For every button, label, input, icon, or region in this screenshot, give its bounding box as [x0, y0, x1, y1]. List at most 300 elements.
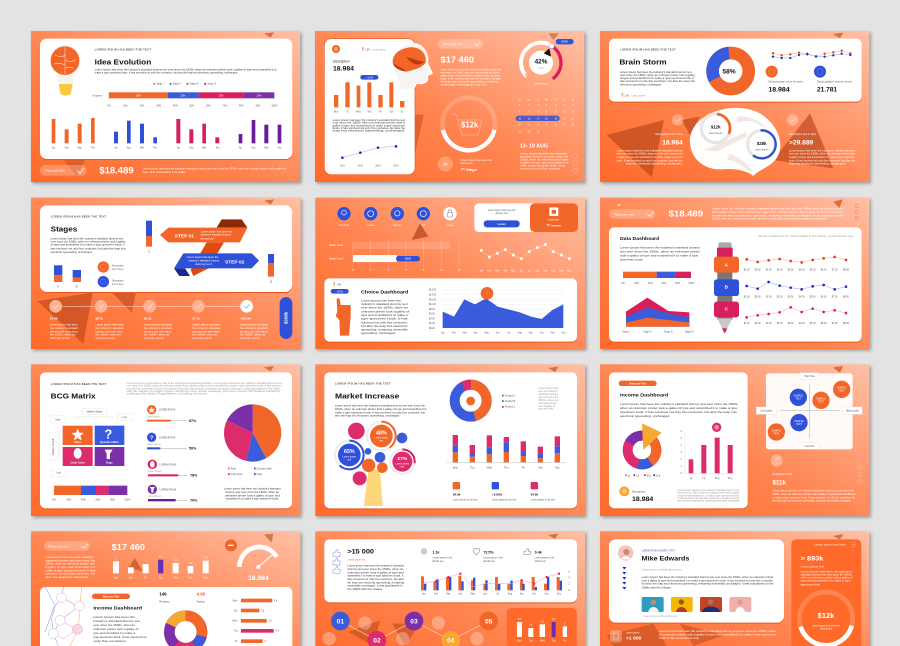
step 01: dummy text [200, 237, 214, 240]
pie legend [228, 467, 273, 476]
line chart: C: $4.00 [799, 323, 805, 325]
line chart: B: $8.00 [843, 297, 850, 299]
text block: standard dummy text ever since the [520, 155, 569, 158]
stacked bar: 100% [124, 500, 130, 502]
blue total pill: $358k [284, 311, 289, 324]
text block: has survived not only five centuries, but also the leap into [51, 247, 127, 250]
bar chart: market size: Market size B [329, 244, 344, 247]
positioning map: SAMPLE [794, 420, 804, 423]
panel: orange bar chart: 3.3 [541, 621, 545, 623]
text block: galley of type and scrambled it to make a type specimen [441, 75, 501, 78]
positioning map: TEXT [795, 399, 802, 401]
panel: white card [324, 539, 577, 603]
timeline values and text: +$35.9k [240, 317, 251, 321]
line chart: B: $0.00 [755, 297, 761, 299]
bar chart: 2 [681, 459, 683, 461]
pill button [44, 541, 90, 551]
slide: numbered stats [315, 531, 587, 646]
progress axis: 20% [140, 105, 144, 107]
calendar: 21 [571, 118, 575, 120]
text block: scrambled it to make a type specimen book. [226, 498, 279, 501]
text block: also the leap into electronic [45, 576, 90, 579]
bar chart: orange: Ag [52, 147, 55, 150]
bar chart: Sun [114, 578, 119, 580]
legend: orange: text in here [112, 268, 124, 271]
icon row: Text Font [339, 224, 349, 227]
line chart: A: $1.00 [766, 270, 772, 272]
combo chart [421, 572, 570, 596]
stat [619, 486, 654, 503]
donut legend: Product B [505, 400, 516, 403]
donut legend [502, 394, 516, 409]
text block: 1500s, when an unknown printer took a galley of type and scrambled it to [335, 408, 428, 411]
ring chart: dummy text [820, 628, 832, 631]
combo chart: Dec [557, 594, 562, 596]
positioning map: SAMPLE [794, 395, 803, 398]
donut legend [625, 474, 661, 477]
combo chart: Jun [483, 594, 488, 596]
text block: Lorem Ipsum has been the industry's standard dummy text ever since the 1500s, [620, 403, 739, 406]
stat: 18.984 [632, 496, 654, 503]
text block [93, 616, 147, 643]
pill button [609, 209, 655, 219]
text block: specimen book. [620, 259, 644, 261]
positioning map: SAMPLE [772, 429, 781, 432]
value: 18.984 [333, 65, 355, 72]
title: Stages [51, 225, 77, 234]
text block: Lorem Ipsum has been the industry's standard [224, 488, 281, 491]
icon row: Sample [393, 225, 402, 227]
bubble: 65% [335, 441, 364, 469]
stacked bar B: B [270, 279, 272, 283]
text block: of type and scrambled it to make a type specimen book. It [51, 244, 125, 247]
pill button: Place your text [442, 42, 462, 46]
bar chart: blue: Mar [140, 147, 144, 150]
calendar: 15 [518, 118, 522, 120]
positioning map: TEXT [796, 424, 803, 426]
calendar: 28 [571, 125, 575, 127]
title: BCG Matrix [51, 391, 96, 400]
text block: Lorem Ipsum has been the industry's standard dummy text ever since the 1500s, when [659, 630, 777, 633]
positioning map: High Quality [846, 410, 860, 413]
text block: essentially unchanged. It was popularised in [347, 585, 403, 588]
icon: paper plane [833, 199, 843, 208]
icon: brain light bulb [50, 45, 80, 96]
panel: orange bar chart: 4.5 [518, 619, 522, 621]
text block: Lorem Ipsum is simply dummy text of the printing and typesetting industry. Lorem Ipsum has been the industry's standard dummy text [127, 382, 282, 385]
pill button: Place your text [45, 169, 65, 173]
bar chart: 2.5 [189, 563, 193, 565]
stat: 72.5% [473, 548, 504, 563]
rating icons [855, 204, 859, 219]
icon: thumbs up set [333, 550, 340, 573]
text block: text ever since the 1500s, when an unknown printer [620, 250, 700, 253]
line chart: white: Nov [559, 270, 564, 272]
area chart: Stage IV [685, 331, 694, 334]
text block: 1960s with the release of Letraset sheets containing Lorem Ipsum passages and more [712, 218, 828, 221]
panel: orange bar chart: 4.3 [552, 619, 556, 621]
right stat: Description text in here [789, 132, 817, 136]
timeline values and text: dummy text ever since [50, 330, 79, 333]
legend: Stage I [156, 83, 164, 86]
text block: electronic typesetting, unchanged. [620, 84, 662, 87]
bar chart: pink: Thu [215, 148, 220, 150]
metric: 70%: LOREM IPSUM [160, 489, 176, 491]
bar chart: market size: 0 [352, 270, 354, 272]
heading: LOREM IPSUM IS SIMPLY TEXT [642, 551, 676, 553]
stat label: 1.98 [624, 95, 630, 97]
stacked bar: 60% [96, 500, 100, 502]
stat: 1.1k: 1.1k [432, 551, 440, 555]
text block [538, 387, 559, 411]
bar chart: blue: Thu [153, 148, 158, 150]
timeline values and text: Lorem Ipsum has been [144, 324, 173, 327]
quadrant: Question Mark: ? [104, 427, 112, 441]
panel heading: Lorem ipsum text here [814, 544, 847, 547]
panel: orange bar chart: 3 [564, 623, 566, 625]
ring chart with cart: $12k [461, 119, 478, 129]
timeline values and text: $5.2k [144, 317, 152, 321]
stacked bar B [268, 254, 274, 283]
line chart: B: $5.00 [810, 297, 816, 299]
legend: orange: Description [112, 265, 124, 268]
progress axis: 80% [239, 105, 244, 107]
stat: orange: Lorem ipsum in the text [453, 498, 478, 501]
stat box: >1 600 [626, 636, 642, 642]
area chart: $4.00 [429, 318, 436, 320]
timeline values and text: the industry's standard [192, 327, 221, 330]
text block: Lorem Ipsum has [538, 387, 559, 390]
text block: survived not only five centuries [520, 167, 561, 170]
legend: blue: Description [112, 280, 124, 283]
progress axis: 50% [189, 105, 194, 107]
text block: Lorem Ipsum has been the industry's standard dummy text [677, 489, 740, 492]
line chart: A: $3.00 [788, 270, 794, 272]
bar chart: blue [114, 121, 158, 150]
area chart: $14.00 [429, 290, 437, 292]
step 01: industry's standard dummy [200, 234, 232, 237]
text block: of type and scrambled it to make a type specimen book. [677, 494, 740, 497]
line chart: B: $3.00 [788, 297, 794, 299]
stacked bar: 60% [662, 283, 666, 285]
donut chart [163, 609, 208, 646]
progress axis: 40% [173, 105, 178, 107]
matrix axes: Low [123, 417, 127, 419]
text block [620, 403, 739, 418]
stat label: Lorem ipsum [632, 94, 645, 97]
timeline values and text: dummy text ever since [95, 330, 124, 333]
panel: orange bar chart: Tue [529, 640, 533, 642]
pill button: Place your text [48, 544, 68, 548]
calendar: 3 [538, 105, 540, 107]
horizontal bar chart: Mon [233, 600, 238, 602]
bar chart: Wed [356, 112, 361, 114]
line chart: 2013 [375, 165, 381, 167]
timeline values and text: the 1500s, when an [192, 334, 219, 337]
icon: pink marker [712, 423, 721, 432]
slide: brain head dashboard [315, 31, 586, 184]
panel: white card [40, 372, 292, 509]
text block: when an unknown printer took a galley of type and scrambled it to make a type [620, 407, 738, 410]
text block: electronic typesetting, unchanged. [51, 251, 93, 254]
peak marker: ↑ [486, 292, 488, 296]
pie legend: Dogs [257, 474, 263, 476]
bubble: 65%: Lorem Ipsum [343, 455, 356, 458]
pill button: Place your text [614, 212, 634, 216]
peak marker [481, 287, 493, 300]
node 03: 03 [410, 618, 418, 625]
metric: 78%: LOREM IPSUM [160, 464, 176, 466]
metric: 78%: 78% [190, 474, 198, 478]
text block: to make a type specimen book. It has survived not only five centuries, but [772, 496, 855, 499]
step 01: STEP 01 [175, 233, 194, 239]
stat: Description Here [772, 472, 793, 476]
text block: book. It has survived not only five centuries, but also the [333, 127, 406, 130]
bar chart: Fri [379, 111, 382, 114]
stage badge: 7K [443, 162, 448, 166]
left stat: 18.984 [662, 140, 683, 147]
quadrant: Stars [63, 426, 93, 445]
text block: 1960s with the release. [642, 586, 672, 589]
donut legend: 30 g [646, 475, 652, 477]
combo chart: 4 [568, 578, 570, 580]
bar chart [113, 557, 209, 580]
rating stat: Rating [197, 599, 205, 603]
photo: dark [700, 597, 722, 612]
progress bar: 20% [181, 95, 185, 97]
illustration: pencil [714, 242, 739, 334]
title: Income Dashboard [620, 392, 668, 398]
icon: paper plane [833, 366, 843, 373]
heading: LOREM IPSUM HAS BEEN THE TEXT [51, 215, 107, 219]
text block: text ever since the [538, 396, 559, 399]
panel: call to action: Lorem Ipsum has been the [488, 209, 516, 212]
panel: white card [324, 278, 577, 343]
panel: orange bar chart [507, 608, 577, 646]
bubble: 65%: text [347, 458, 352, 461]
ring chart [793, 586, 859, 646]
area chart: $0.00 [429, 328, 436, 330]
text block [772, 490, 856, 503]
stat label: Lorem ipsum [372, 48, 386, 51]
text block: took a galley of type and scrambled it to make a type [620, 254, 699, 257]
timeline values and text [50, 317, 269, 340]
panel: white card [40, 205, 292, 293]
badge [360, 75, 378, 80]
bar chart: blue: Ag [115, 147, 118, 150]
progress bar: 25% [219, 95, 223, 97]
left stat: Description text in here [655, 132, 683, 136]
positioning map: High Price [804, 375, 816, 378]
ring: $28k: $28k [757, 141, 767, 146]
text block [51, 238, 127, 254]
right stat: text ever since the 1500s, when an unknown printer took [789, 153, 856, 156]
stat label: 1.98 [365, 49, 370, 51]
positioning map: TEXT [773, 433, 780, 435]
progress axis: 0% [107, 105, 111, 107]
metric: 67% [147, 405, 197, 423]
horizontal bar chart: Wed [232, 621, 238, 623]
pill heading: Note your Title [630, 382, 646, 385]
stat: blue: 21.781 [817, 86, 837, 93]
text block: type specimen book. It has survived not [93, 636, 147, 639]
date heading: 13- 19 AUG [520, 144, 548, 150]
panel heading [814, 543, 856, 547]
line chart [772, 49, 851, 59]
text block: unknown printer took a galley of type and [347, 571, 405, 574]
bar chart: blue: Sep [127, 148, 131, 150]
area chart: $10.00 [429, 304, 437, 306]
stacked bar: 0% [52, 500, 56, 502]
stat: Description [632, 489, 646, 493]
calendar: 25 [545, 125, 548, 127]
text block: type specimen book. It has [361, 318, 409, 321]
calendar: 16 [528, 118, 531, 120]
text block: Lorem Ipsum has been the industry's [520, 152, 568, 155]
text block: leap into electronic typesetting, unchanged. [333, 130, 406, 133]
stacked bar [621, 272, 694, 285]
gauge: 42% [535, 59, 548, 66]
reviews stat: 149 [159, 592, 167, 597]
donut legend: 4 g [636, 475, 640, 477]
left stat: text ever since the 1500s, when an unknown printer took [617, 153, 684, 156]
stat label [331, 282, 349, 294]
line chart: A: $8.00 [843, 270, 850, 272]
panel: white card [40, 39, 292, 160]
quadrant: Stars: Stars [74, 440, 82, 444]
text block: has survived not only five centuries, but also the leap into [620, 80, 696, 83]
text block: unknown printer took a galley of [93, 628, 139, 631]
decorative triangle [548, 33, 559, 40]
bar chart: market size: 10 [440, 270, 443, 272]
decorative triangles [348, 620, 420, 646]
ring: $28k: Lorem ipsum [755, 149, 768, 152]
panel: white card [40, 587, 292, 646]
timeline values and text: the 1500s, when an [95, 334, 122, 337]
line chart: white [479, 243, 572, 272]
stacked bar: 0% [621, 283, 625, 285]
bar chart: market size: 12 [458, 270, 461, 272]
stat: pink [531, 482, 555, 501]
bar chart: Sat [129, 577, 133, 580]
line chart: A: $7.00 [832, 270, 838, 272]
line chart: C: $5.00 [810, 323, 816, 325]
progress bar: Progress [93, 94, 103, 97]
calendar: 13 [563, 111, 566, 113]
timeline values and text: unknown printer [50, 337, 70, 340]
value: $18.489 [99, 166, 134, 176]
decorative triangles [607, 624, 723, 646]
bubble: 27% [390, 449, 415, 474]
calendar: 19 [554, 118, 558, 120]
text block [801, 565, 853, 586]
text block: took a galley of type and scrambled it to make a type specimen book. It has survived not only five centuries, [642, 579, 774, 582]
line chart: B: $1.00 [766, 297, 772, 299]
text block [95, 68, 277, 75]
text block: Lorem Ipsum has been the [361, 299, 402, 302]
combo chart: Oct [532, 593, 536, 596]
stat: 0.4k: dhsdis text [535, 560, 546, 563]
metric: 50%: Lorem ipsum [147, 443, 161, 446]
bar chart: pink: Mar [202, 147, 206, 150]
bar chart: purple: Ag [239, 147, 242, 150]
stacked bar chart: Thu [504, 466, 509, 470]
icon: head with brain [392, 43, 432, 89]
decorative triangles [607, 113, 833, 177]
text block: took a galley of type and scrambled it to make a type specimen book. It has survived not only five centuries, [712, 211, 844, 214]
text block: dummy text ever since the 1500s, when an [226, 491, 280, 494]
icon: paper plane [833, 534, 843, 539]
bar chart [681, 431, 737, 480]
stat: orange: $4.6k [453, 492, 461, 496]
text block: specimen book. [801, 584, 821, 586]
pill button [438, 39, 483, 49]
metric: 50%: LOREM IPSUM [159, 437, 175, 439]
timeline [49, 300, 253, 313]
value: $17 460 [112, 542, 145, 552]
text block: galley of type and scrambled it to make a type specimen [333, 124, 406, 127]
bar chart: 3.3 [174, 560, 178, 562]
text block [127, 382, 282, 396]
text block [520, 152, 569, 170]
text block: Lorem Ipsum has been the industry's standard dummy text ever since the 1500s, when an unknown printer [712, 208, 844, 211]
stat: orange [453, 482, 478, 501]
matrix axes: High [56, 419, 61, 421]
photo: blue [642, 597, 664, 612]
text block: ever since the 1500s, when an unknown printer took a galley [51, 241, 127, 244]
slide: Choice Dashboard [315, 198, 587, 351]
line chart: 2012 [358, 165, 364, 167]
positioning map: Low Price [805, 445, 815, 448]
calendar: 9 [528, 111, 530, 113]
right stat: a galley of type and scrambled it to make a type specimen [789, 156, 856, 159]
node 03 [405, 612, 423, 630]
ring chart: Lorem ipsum has been the [812, 624, 840, 627]
stat label [362, 47, 386, 52]
gauge: 80396 [561, 42, 569, 44]
stat: blue: +5.83% [492, 492, 503, 496]
stage badge: Lorem ipsum has been the [460, 159, 493, 162]
stat box [610, 630, 642, 642]
panel: call to action: Lorem [498, 222, 506, 226]
bubble: 48% [367, 422, 396, 450]
title: Income Dashboard [93, 606, 142, 612]
stat: pink: Lorem ipsum in the text [531, 498, 555, 501]
combo chart: Mar [446, 593, 451, 596]
reviews stat [159, 592, 170, 603]
subtitle: Lorem ipsum text [347, 559, 366, 562]
timeline values and text: the 1500s, when an [240, 334, 266, 337]
stacked bar: 40% [648, 283, 653, 285]
calendar [516, 99, 575, 133]
bar chart: Mon [203, 578, 209, 580]
timeline values and text: the industry's standard [144, 327, 173, 330]
calendar: Sa [571, 100, 575, 102]
timeline values and text: Lorem Ipsum has been [95, 324, 124, 327]
right stat: leap into electronic typesetting, unchanged. [789, 163, 846, 166]
area chart: Jul [507, 332, 511, 334]
bar chart: 6 [681, 431, 683, 433]
bar chart: pink: Sep [189, 148, 194, 150]
bar chart: Thu [159, 578, 163, 580]
gauge: Lorem ipsum [534, 82, 548, 85]
calendar: 30 [528, 131, 531, 133]
timeline values and text: Lorem Ipsum has been [50, 324, 79, 327]
calendar: 18 [545, 118, 548, 120]
text block: standard dummy text ever since the 1500s, [801, 574, 853, 577]
calendar: Su [518, 100, 522, 102]
decorative triangle [264, 534, 273, 543]
